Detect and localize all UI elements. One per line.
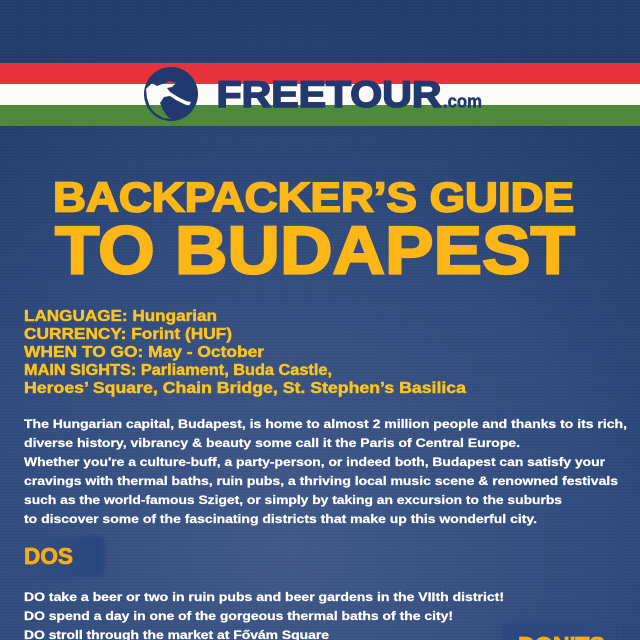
key facts: LANGUAGE: Hungarian [24,308,217,325]
key facts: WHEN TO GO: May - October [24,344,264,361]
flag stripes [0,63,640,126]
key facts [24,308,466,397]
intro paragraph: diverse history, vibrancy & beauty some call it the Paris of Central Europe. [24,436,520,450]
dos list: DO spend a day in one of the gorgeous thermal baths of the city! [24,609,453,623]
icon: globe [144,67,198,121]
wordmark: FREETOUR [216,74,442,115]
title [53,174,575,288]
wordmark suffix: .com [443,92,482,112]
key facts: MAIN SIGHTS: Parliament, Buda Castle, [24,362,332,379]
logo [144,67,482,121]
intro paragraph: The Hungarian capital, Budapest, is home to almost 2 million people and thanks to its rich, [24,417,627,431]
intro paragraph: Whether you're a culture-buff, a party-person, or indeed both, Budapest can satisfy your [24,455,605,469]
intro paragraph: such as the world-famous Sziget, or simply by taking an excursion to the suburbs [24,493,562,507]
panel: dos heading: DOS [24,543,73,569]
intro paragraph: to discover some of the fascinating districts that make up this wonderful city. [24,512,537,526]
dos list [24,590,504,640]
intro paragraph: cravings with thermal baths, ruin pubs, a thriving local music scene & renowned festivals [24,474,618,488]
panel: dos heading [24,536,105,577]
intro paragraph [24,417,627,526]
key facts: CURRENCY: Forint (HUF) [24,326,232,343]
key facts: Heroes’ Square, Chain Bridge, St. Stephen’s Basilica [24,380,466,397]
panel: donts heading [503,623,618,640]
title: TO BUDAPEST [55,212,575,288]
title: BACKPACKER’S GUIDE [53,174,574,220]
dos list: DO take a beer or two in ruin pubs and beer gardens in the VIIth district! [24,590,504,604]
